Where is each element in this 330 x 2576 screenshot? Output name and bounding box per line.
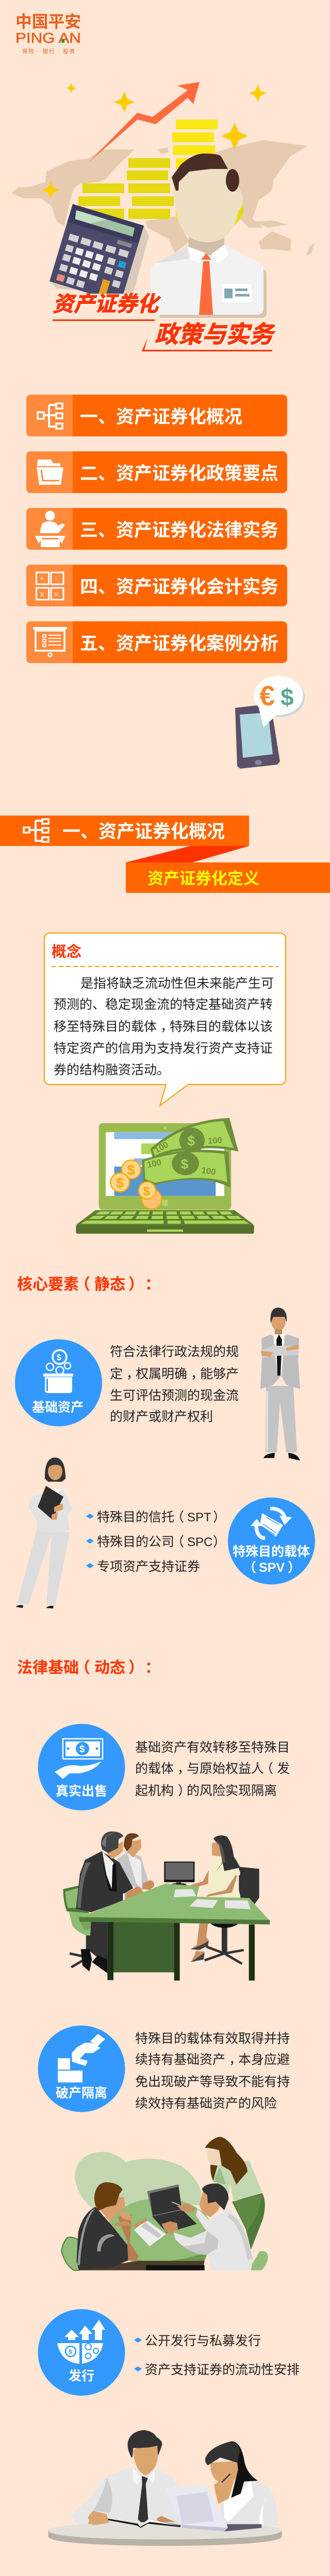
heading: 核心要素: 静态 <box>94 1276 125 1293</box>
woman <box>183 1835 241 1962</box>
icon: coins in a box <box>43 1350 73 1393</box>
illustration: standing man <box>260 1308 300 1461</box>
upper banknote <box>151 1118 238 1159</box>
text: 破产隔离 description: 免出现破产等导致不能有持 <box>135 2075 290 2089</box>
circle: 真实出售 <box>38 1724 125 1810</box>
menu item 1 <box>26 395 287 436</box>
list: SPV types: （ <box>171 1510 184 1524</box>
menu item 4: + <box>40 574 44 583</box>
panel: 概念 speech bubble: 移至特殊目的载体 ，特殊目的载体以该 <box>54 1020 273 1034</box>
heading: 法律基础: ： <box>145 1659 160 1676</box>
upper banknote: 100 <box>153 1140 170 1155</box>
text: 真实出售 description <box>135 1740 290 1798</box>
heading: 核心要素: ： <box>145 1276 160 1293</box>
circle: 特殊目的载体: （ <box>243 1561 256 1575</box>
man <box>71 2430 182 2528</box>
text: 真实出售 description: 的载体 ，与原始权益人（ 发 <box>135 1761 290 1776</box>
illustration: two colleagues at table <box>48 2430 282 2546</box>
panel: 概念 speech bubble: 预测的、稳定现金流的特定基础资产转 <box>54 997 273 1012</box>
gold bars <box>172 120 218 219</box>
menu item 4: x <box>40 590 44 599</box>
menu item 1: 一、资产证券化概况 <box>80 407 242 427</box>
list: SPV types: 特殊目的信托 <box>97 1510 174 1524</box>
woman's chair base <box>205 1928 244 1964</box>
circle: 特殊目的载体: 特殊目的载体 <box>233 1545 310 1559</box>
menu item 2: 二、资产证券化政策要点 <box>80 464 278 484</box>
title: 资产证券化 政策与实务 <box>52 292 278 351</box>
list: 发行 items: 资产支持证券的流动性安排 <box>145 2363 300 2377</box>
menu item 4: = <box>54 590 59 599</box>
section heading: 一、资产证券化概况: 资产证券化定义 <box>147 870 259 888</box>
heading: 法律基础: 动态 <box>94 1659 125 1676</box>
circle: 发行: 发行 <box>69 2369 94 2383</box>
text: 基础资产 description: 生可评估预测的现金流 <box>110 1388 239 1403</box>
text: 破产隔离 description: 续持有基础资产 ，本身应避 <box>135 2053 290 2067</box>
heading: 核心要素: （ <box>75 1276 90 1293</box>
woman <box>205 2441 279 2526</box>
text: 基础资产 description: 的财产或财产权利 <box>110 1410 213 1424</box>
menu item 4 <box>26 565 287 606</box>
table <box>48 2522 282 2546</box>
seated man, right <box>161 2183 253 2270</box>
panel: 概念 speech bubble: 券的结构融资活动。 <box>54 1063 170 1077</box>
coins: $ <box>116 1175 124 1191</box>
menu item 3 <box>26 508 287 550</box>
calculator <box>50 204 149 303</box>
circle: 特殊目的载体 <box>228 1497 315 1585</box>
icon: arrows over bowl <box>57 2320 105 2364</box>
menu item 5: 五、资产证券化案例分析 <box>80 634 278 654</box>
menu item 5 <box>26 621 287 663</box>
menu item 4: 四、资产证券化会计实务 <box>80 577 278 597</box>
section heading: 一、资产证券化概况: 一、资产证券化概况 <box>62 822 225 842</box>
text: 破产隔离 description: 特殊目的载体有效取得并持 <box>135 2031 290 2046</box>
circle: 特殊目的载体: ） <box>288 1561 301 1575</box>
panel: 概念 speech bubble <box>44 933 286 1106</box>
circle: 特殊目的载体: SPV <box>259 1561 285 1575</box>
list: SPV types: 专项资产支持证券 <box>97 1560 200 1574</box>
title: 资产证券化 政策与实务: 政策与实务 <box>154 321 278 348</box>
list: 发行 items: 公开发行与私募发行 <box>145 2334 261 2348</box>
laptop <box>165 2486 261 2531</box>
menu item 4: - <box>55 574 57 583</box>
icon: phone with currency bubble: $ <box>280 684 294 710</box>
icon: money cycle <box>251 1509 292 1538</box>
logo: Ping An: PING AN <box>15 30 81 46</box>
circle: 真实出售: 真实出售 <box>56 1784 107 1799</box>
illustration: team around laptop <box>61 2137 268 2270</box>
hero illustration <box>11 82 315 318</box>
lower banknote: 100 <box>201 1165 217 1177</box>
icon: phone with currency bubble <box>235 676 305 769</box>
green chair <box>63 1885 103 1967</box>
illustration: meeting at green table <box>63 1832 270 1980</box>
text: 基础资产 description: 符合法律行政法规的规 <box>110 1345 239 1359</box>
menu item 3: 三、资产证券化法律实务 <box>80 520 278 540</box>
illustration: laptop with money <box>76 1118 254 1234</box>
list: SPV types <box>86 1510 226 1574</box>
heading: 核心要素: 核心要素 <box>17 1276 79 1293</box>
list: 发行 items <box>134 2334 300 2377</box>
lower banknote: 100 <box>146 1157 162 1170</box>
heading: 核心要素: ） <box>128 1276 144 1293</box>
monitor <box>164 1861 194 1886</box>
table <box>79 1884 270 1980</box>
circle: 基础资产 <box>15 1340 102 1426</box>
coins <box>110 1160 161 1209</box>
upper banknote: $ <box>187 1133 195 1148</box>
icon: coins in a box: $ <box>57 1353 61 1362</box>
lower banknote: $ <box>181 1156 189 1172</box>
list: SPV types: 特殊目的公司 <box>97 1535 174 1549</box>
standing woman <box>205 2137 265 2250</box>
book <box>96 2517 180 2528</box>
coins: $ <box>127 1162 135 1178</box>
list: SPV types: ） <box>213 1510 226 1524</box>
upper banknote: 100 <box>208 1136 222 1146</box>
list: SPV types: ） <box>213 1535 226 1549</box>
list: SPV types: SPT <box>187 1511 211 1524</box>
circle: 基础资产: 基础资产 <box>32 1400 84 1415</box>
text: 基础资产 description: 定 ，权属明确 ，能够产 <box>110 1367 239 1381</box>
list: SPV types: （ <box>171 1535 184 1549</box>
table <box>107 2198 213 2267</box>
menu <box>26 395 287 663</box>
circle: 破产隔离: 破产隔离 <box>56 2086 107 2100</box>
seated man, left <box>76 2182 148 2270</box>
text: 基础资产 description <box>110 1345 239 1424</box>
logo: Ping An <box>15 12 81 55</box>
icon: arrows over bowl: $ <box>69 2348 72 2355</box>
icon: banknote in hand: $ <box>79 1744 85 1755</box>
chairs <box>61 2237 79 2270</box>
illustration: woman with folder <box>16 1458 73 1608</box>
panel: 概念 speech bubble: 特定资产的信用为支持发行资产支持证 <box>54 1041 273 1056</box>
icon: phone with currency bubble: € <box>259 681 275 711</box>
title: 资产证券化 政策与实务: 资产证券化 <box>52 292 163 316</box>
icon: puzzle and hand <box>58 2034 105 2082</box>
arrow <box>88 82 200 163</box>
heading: 法律基础: ） <box>128 1659 144 1676</box>
logo: Ping An: 保险 · 银行 · 投资 <box>22 48 75 55</box>
heading: 法律基础: （ <box>75 1659 90 1676</box>
man 2 in silver jacket <box>117 1833 154 1890</box>
man 1 in dark suit <box>76 1832 144 1973</box>
text: 真实出售 description: 起机构 ）的风险实现隔离 <box>135 1784 277 1798</box>
circle: 发行 <box>38 2309 125 2396</box>
businessman <box>151 154 267 318</box>
menu item 2 <box>26 451 287 493</box>
list: SPV types: SPC <box>187 1535 212 1549</box>
icon: banknote in hand <box>55 1739 103 1779</box>
section heading: 一、资产证券化概况 <box>0 816 330 893</box>
text: 破产隔离 description <box>135 2031 290 2111</box>
logo: Ping An: 中国平安 <box>15 12 81 31</box>
world map <box>11 140 315 256</box>
laptop <box>134 2184 197 2246</box>
coins: $ <box>143 1184 150 1198</box>
text: 真实出售 description: 基础资产有效转移至特殊目 <box>135 1740 290 1755</box>
text: 破产隔离 description: 续效持有基础资产的风险 <box>135 2096 277 2111</box>
stars <box>42 83 267 199</box>
lower banknote <box>142 1150 230 1188</box>
heading: 法律基础: 法律基础 <box>17 1659 79 1676</box>
panel: 概念 speech bubble: 概念 <box>52 943 81 960</box>
circle: 破产隔离 <box>38 2026 125 2112</box>
panel: 概念 speech bubble: 是指将缺乏流动性但未来能产生可 <box>80 976 274 991</box>
